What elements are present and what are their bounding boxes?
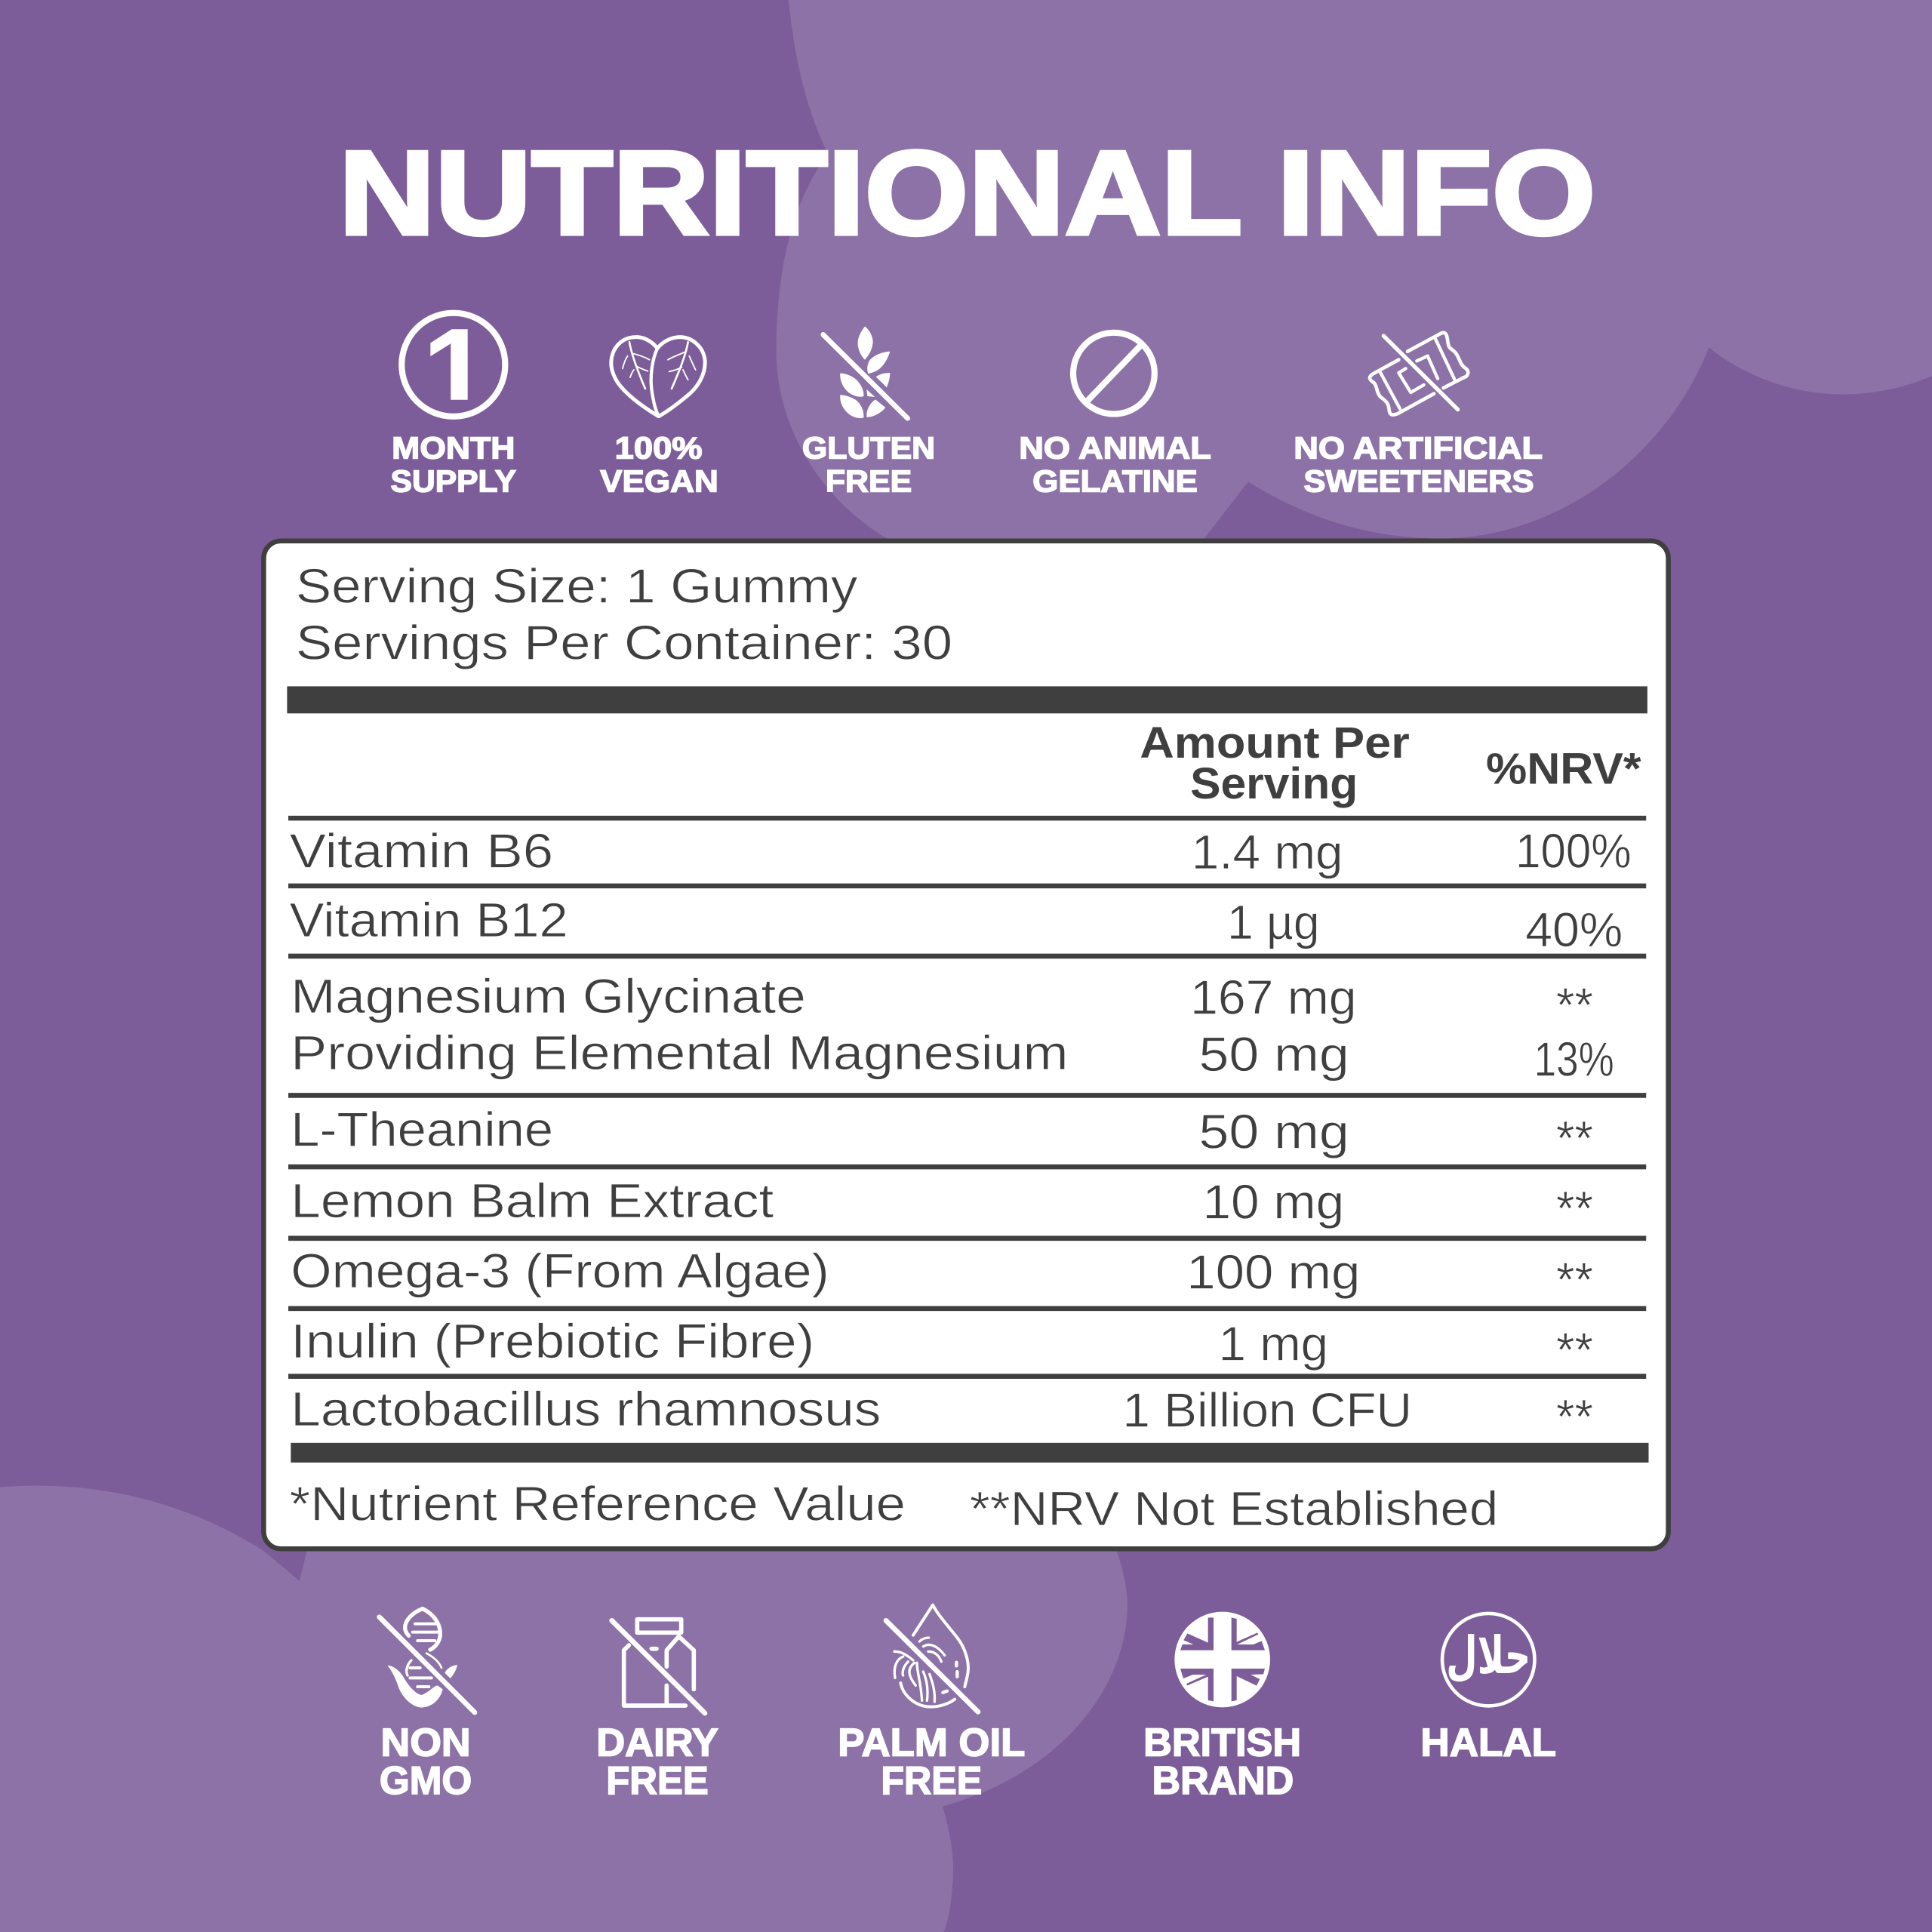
label: month supply [391,430,516,498]
background blob: top right [777,0,1932,542]
row: vitamin b6: 100% [1515,824,1632,878]
label: gluten free: FREE [826,463,912,498]
row: omega-3: ** [1556,1254,1593,1307]
row: magnesium: 50 mg [1199,1028,1349,1081]
row: lemon balm: Lemon Balm Extract [291,1174,774,1228]
row: inulin: Inulin (Prebiotic Fibre) [291,1315,814,1368]
row: magnesium: 13% [1534,1032,1614,1086]
label: british brand: BRAND [1152,1759,1294,1803]
label: british brand [1143,1721,1301,1803]
label: halal: HALAL [1420,1721,1556,1765]
label: palm oil free: PALM OIL [838,1721,1025,1765]
icon: halal [1442,1614,1534,1706]
background blob: bottom left [0,1486,1128,1932]
row: magnesium [291,970,1614,1086]
label: 100% vegan: VEGAN [600,463,718,498]
row: omega-3: 100 mg [1186,1246,1360,1300]
label: no artificial sweeteners: SWEETENERS [1303,463,1534,498]
row: vitamin b12: 40% [1525,903,1623,957]
icon: vegan leaf heart [611,337,705,417]
bottom claims row [380,1605,1556,1803]
top claims row [391,303,1543,498]
row: magnesium: Providing Elemental Magnesium [291,1026,1069,1080]
label: non gmo: GMO [380,1759,472,1803]
title: NUTRITIONAL INFO [339,126,1595,260]
footnotes: **NRV Not Established [970,1482,1498,1536]
row: lemon balm: ** [1556,1182,1593,1235]
row: lactobacillus: ** [1556,1390,1593,1444]
label: dairy free: DAIRY [596,1721,718,1765]
row: magnesium: ** [1556,978,1593,1032]
label: 100% vegan [600,430,718,498]
row: inulin: ** [1556,1324,1593,1377]
column heading: amount per serving: Amount Per [1140,718,1410,768]
icon: gluten free wheat [823,327,908,418]
icon: british flag [1174,1612,1270,1707]
row: l-theanine: L-Theanine [291,1103,553,1156]
footnotes [290,1478,1498,1536]
icon: one month: 1 [422,303,491,441]
label: month supply: MONTH [392,430,515,465]
column heading: nrv: %NRV* [1486,744,1641,793]
row: inulin [291,1315,1593,1377]
label: no animal gelatine: GELATINE [1032,463,1198,498]
row: vitamin b12 [290,894,1623,957]
serving info [296,559,952,669]
footnotes: *Nutrient Reference Value [290,1478,906,1531]
row: lemon balm [291,1174,1593,1235]
row: omega-3: Omega-3 (From Algae) [291,1244,829,1298]
label: no animal gelatine [1019,430,1211,498]
row: inulin: 1 mg [1219,1317,1328,1371]
label: month supply: SUPPLY [391,463,516,498]
row: vitamin b6: Vitamin B6 [290,824,553,878]
label: non gmo: NON [380,1721,471,1765]
row: l-theanine: ** [1556,1112,1593,1165]
column heading: amount per serving: Serving [1190,759,1358,808]
row: magnesium: Magnesium Glycinate [291,970,806,1023]
row: lactobacillus [291,1383,1593,1444]
row: vitamin b12: 1 µg [1227,896,1320,949]
icon: non gmo dna [380,1609,475,1712]
icon: no animal gelatine [1073,333,1155,414]
label: dairy free: FREE [606,1759,709,1803]
row: lactobacillus: 1 Billion CFU [1122,1384,1412,1438]
label: dairy free [596,1721,718,1803]
serving info: Serving Size: 1 Gummy [296,559,858,613]
panel: nutrition table [263,541,1669,1549]
row: lactobacillus: Lactobacillus rhamnosus [291,1383,881,1436]
label: palm oil free [838,1721,1025,1803]
row: vitamin b6: 1.4 mg [1192,826,1343,879]
row: l-theanine: 50 mg [1199,1106,1349,1159]
row: omega-3 [291,1244,1593,1307]
serving info: Servings Per Container: 30 [296,616,952,669]
label: british brand: BRITISH [1143,1721,1301,1765]
column heading: amount per serving [1140,718,1410,808]
label: non gmo [380,1721,472,1803]
icon: palm oil free drop [886,1605,978,1712]
icon: dairy free carton [612,1620,705,1713]
label: 100% vegan: 100% [615,430,703,465]
label: palm oil free: FREE [881,1759,982,1803]
icon: one month [398,309,509,420]
icon: no artificial sweeteners candy [1370,333,1468,415]
row: l-theanine [291,1103,1593,1165]
label: gluten free [802,430,935,498]
label: gluten free: GLUTEN [802,430,935,465]
row: lemon balm: 10 mg [1202,1176,1344,1229]
row: magnesium: 167 mg [1190,971,1357,1025]
row: vitamin b12: Vitamin B12 [290,894,568,947]
label: no artificial sweeteners [1294,430,1543,498]
row: vitamin b6 [290,824,1632,879]
label: no artificial sweeteners: NO ARTIFICIAL [1294,430,1543,465]
icon: halal: حلال [1446,1625,1531,1685]
label: no animal gelatine: NO ANIMAL [1019,430,1211,465]
